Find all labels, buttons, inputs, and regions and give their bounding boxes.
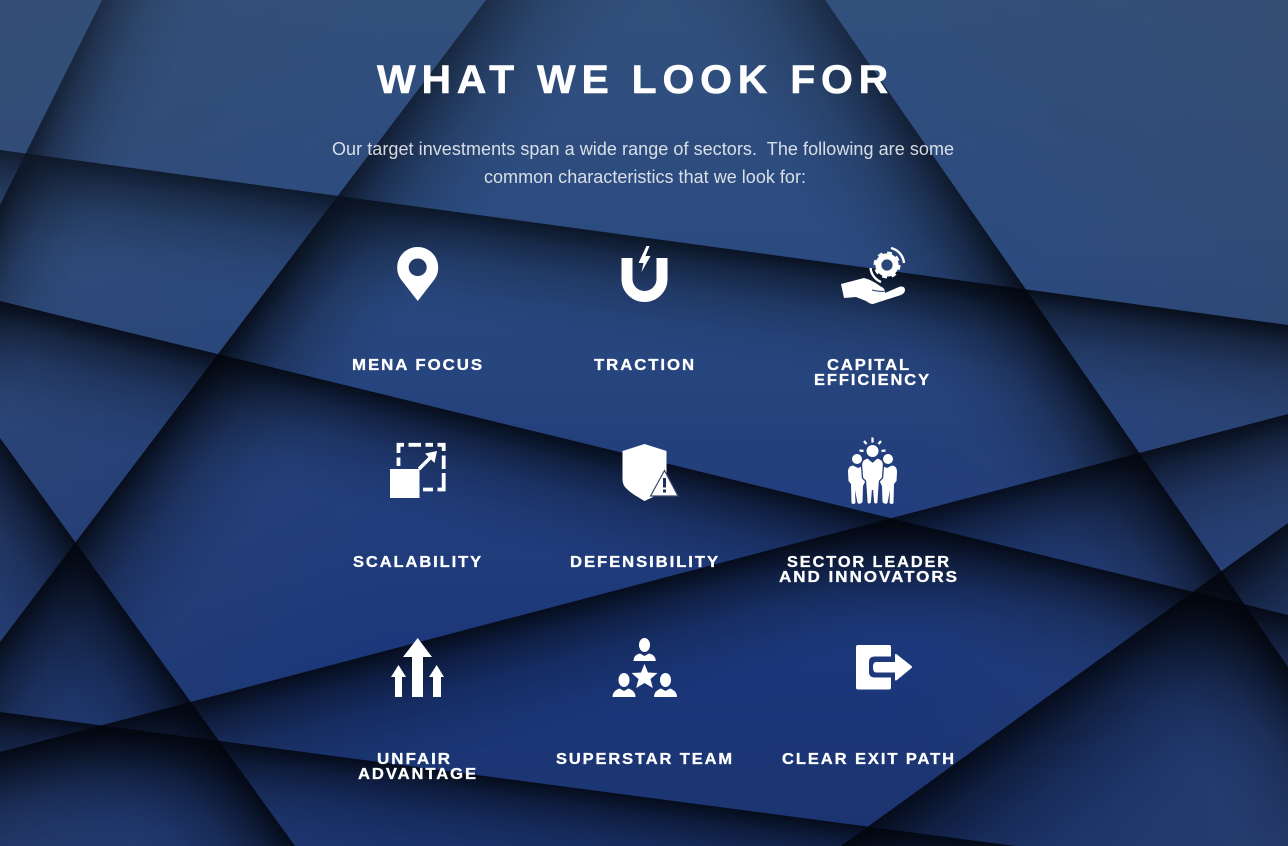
label: UNFAIR — [377, 751, 452, 768]
label: AND INNOVATORS — [779, 569, 959, 586]
label: ADVANTAGE — [358, 766, 478, 783]
label: CAPITAL — [827, 357, 911, 374]
label: MENA FOCUS — [352, 357, 484, 374]
title: WHAT WE LOOK FOR — [377, 58, 894, 102]
icon: shield with warning — [622, 444, 678, 501]
item: capital efficiency — [814, 248, 931, 389]
intro text: common characteristics that we look for: — [484, 167, 806, 187]
label: TRACTION — [594, 357, 696, 374]
label: DEFENSIBILITY — [570, 554, 720, 571]
item: superstar team — [556, 638, 734, 768]
label — [779, 554, 959, 586]
item: sector leader and innovators — [779, 438, 959, 586]
intro text — [332, 139, 954, 187]
item: clear exit path — [782, 645, 956, 768]
icon: hand with gear — [841, 248, 905, 304]
label: CLEAR EXIT PATH — [782, 751, 956, 768]
label: SCALABILITY — [353, 554, 483, 571]
label — [814, 357, 931, 389]
icon: exit door with arrow — [856, 645, 912, 690]
label: SUPERSTAR TEAM — [556, 751, 734, 768]
icon: magnet with bolt — [627, 246, 662, 296]
intro text: Our target investments span a wide range of sectors. The following are some — [332, 139, 954, 159]
icon: group with leader — [848, 438, 897, 504]
label: SECTOR LEADER — [787, 554, 951, 571]
item: MENA focus — [352, 247, 484, 374]
icon: star and three people — [612, 638, 677, 697]
item: defensibility — [570, 444, 720, 571]
item: unfair advantage — [358, 638, 478, 783]
label: EFFICIENCY — [814, 372, 931, 389]
item: scalability — [353, 445, 483, 571]
label — [358, 751, 478, 783]
icon: map pin — [397, 247, 438, 301]
icon: expanding square — [390, 445, 444, 498]
icon: three up arrows — [391, 638, 444, 697]
item: traction — [594, 246, 696, 374]
